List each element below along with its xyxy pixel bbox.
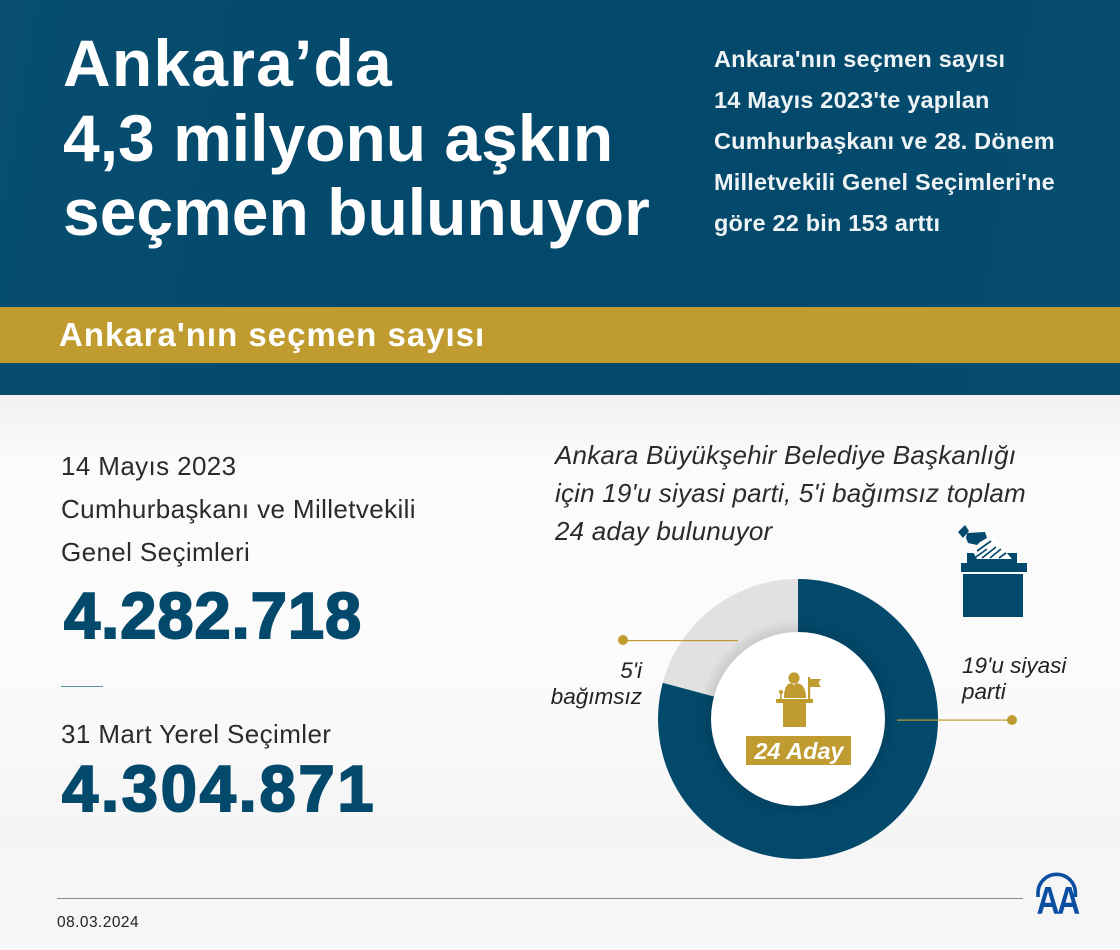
- title: 4,3 milyonu aşkın: [63, 100, 613, 174]
- first election label: Cumhurbaşkanı ve Milletvekili: [61, 494, 416, 524]
- summary text: [714, 46, 1055, 236]
- donut chart: [658, 579, 938, 859]
- title: seçmen bulunuyor: [63, 175, 650, 249]
- donut slice: 5 independents: [663, 579, 798, 719]
- label: independents: bağımsız: [551, 684, 642, 709]
- hand: [958, 525, 987, 545]
- box top: [967, 553, 1017, 563]
- first election label: Genel Seçimleri: [61, 537, 250, 567]
- leader line: independents: [618, 635, 738, 645]
- header panel: [0, 0, 1120, 395]
- banner heading: Ankara'nın seçmen sayısı: [59, 316, 485, 353]
- summary text: Milletvekili Genel Seçimleri'ne: [714, 169, 1055, 195]
- chart heading: Ankara Büyükşehir Belediye Başkanlığı: [555, 440, 1016, 470]
- chart heading: 24 aday bulunuyor: [555, 516, 772, 546]
- leader line: parties: [897, 715, 1017, 725]
- summary text: Ankara'nın seçmen sayısı: [714, 46, 1005, 72]
- title: Ankara’da: [63, 26, 393, 100]
- icon: ballot box: [958, 525, 1027, 617]
- label: parties: parti: [961, 679, 1007, 704]
- summary text: göre 22 bin 153 arttı: [714, 210, 940, 236]
- label: independents: 5'i: [620, 658, 642, 683]
- chart heading: [554, 440, 1026, 546]
- divider between election figures: [61, 686, 103, 687]
- date: 08.03.2024: [57, 914, 139, 931]
- first election label: [61, 451, 416, 567]
- summary text: Cumhurbaşkanı ve 28. Dönem: [714, 128, 1055, 154]
- logo: AA: AA: [1036, 879, 1080, 923]
- summary text: 14 Mayıs 2023'te yapılan: [714, 87, 990, 113]
- icon: candidate at podium: [776, 672, 821, 727]
- box lid: [961, 563, 1027, 572]
- second election number: 4.304.871: [62, 752, 376, 825]
- donut shadow: [698, 619, 898, 819]
- section banner: [0, 307, 1120, 363]
- chart heading: için 19'u siyasi parti, 5'i bağımsız toplam: [555, 478, 1026, 508]
- second election label: 31 Mart Yerel Seçimler: [61, 719, 331, 749]
- first election block: [61, 451, 416, 652]
- footer rule: [57, 898, 1023, 899]
- first election number: 4.282.718: [64, 579, 362, 652]
- donut slice: 19 parties: [658, 579, 938, 859]
- first election label: 14 Mayıs 2023: [61, 451, 236, 481]
- lower panel: [0, 395, 1120, 950]
- ballot: [973, 537, 1012, 559]
- donut hole: [711, 632, 885, 806]
- second election block: [61, 719, 376, 825]
- 24 Aday badge: 24 Aday: [753, 738, 846, 764]
- title: [63, 26, 650, 249]
- box body: [963, 574, 1023, 617]
- label: parties: 19'u siyasi: [962, 653, 1066, 678]
